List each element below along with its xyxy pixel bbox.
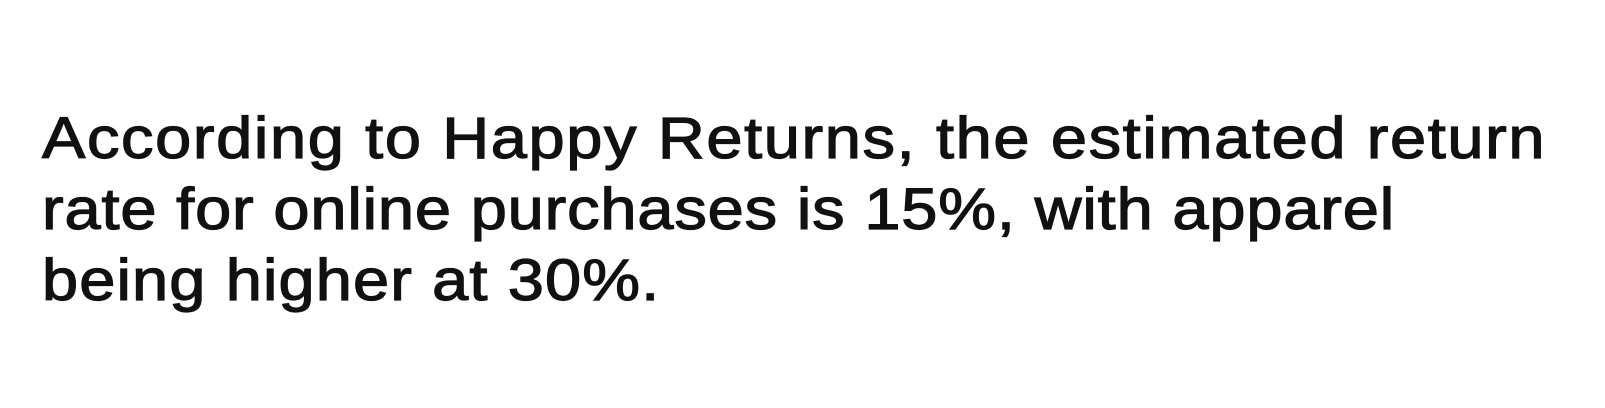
text line 3: being higher at 30%. xyxy=(42,248,660,313)
text line 1: According to Happy Returns, the estimated return xyxy=(42,106,1546,171)
text block: statement xyxy=(41,106,1546,313)
text line 2: rate for online purchases is 15%, with apparel xyxy=(42,177,1395,242)
